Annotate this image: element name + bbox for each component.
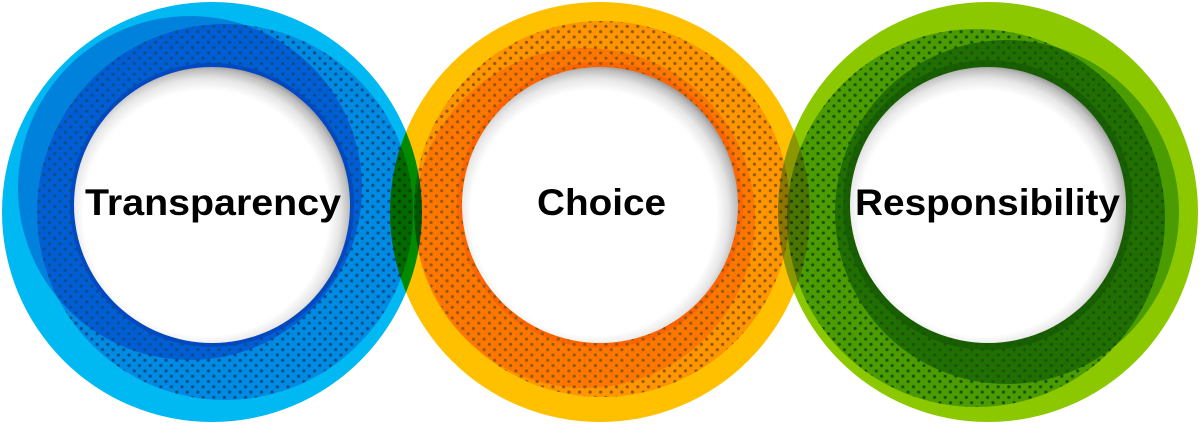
label: Transparency: Transparency <box>85 182 341 223</box>
center disc: transparency <box>74 67 350 343</box>
label: Responsibility: Responsibility <box>855 182 1120 223</box>
ring: responsibility (green) <box>778 2 1198 422</box>
label: Choice: Choice <box>537 182 666 223</box>
center disc: responsibility <box>850 67 1126 343</box>
ring: choice (orange) <box>390 2 810 422</box>
center disc: choice <box>462 67 738 343</box>
ring: transparency (blue) <box>2 2 422 422</box>
